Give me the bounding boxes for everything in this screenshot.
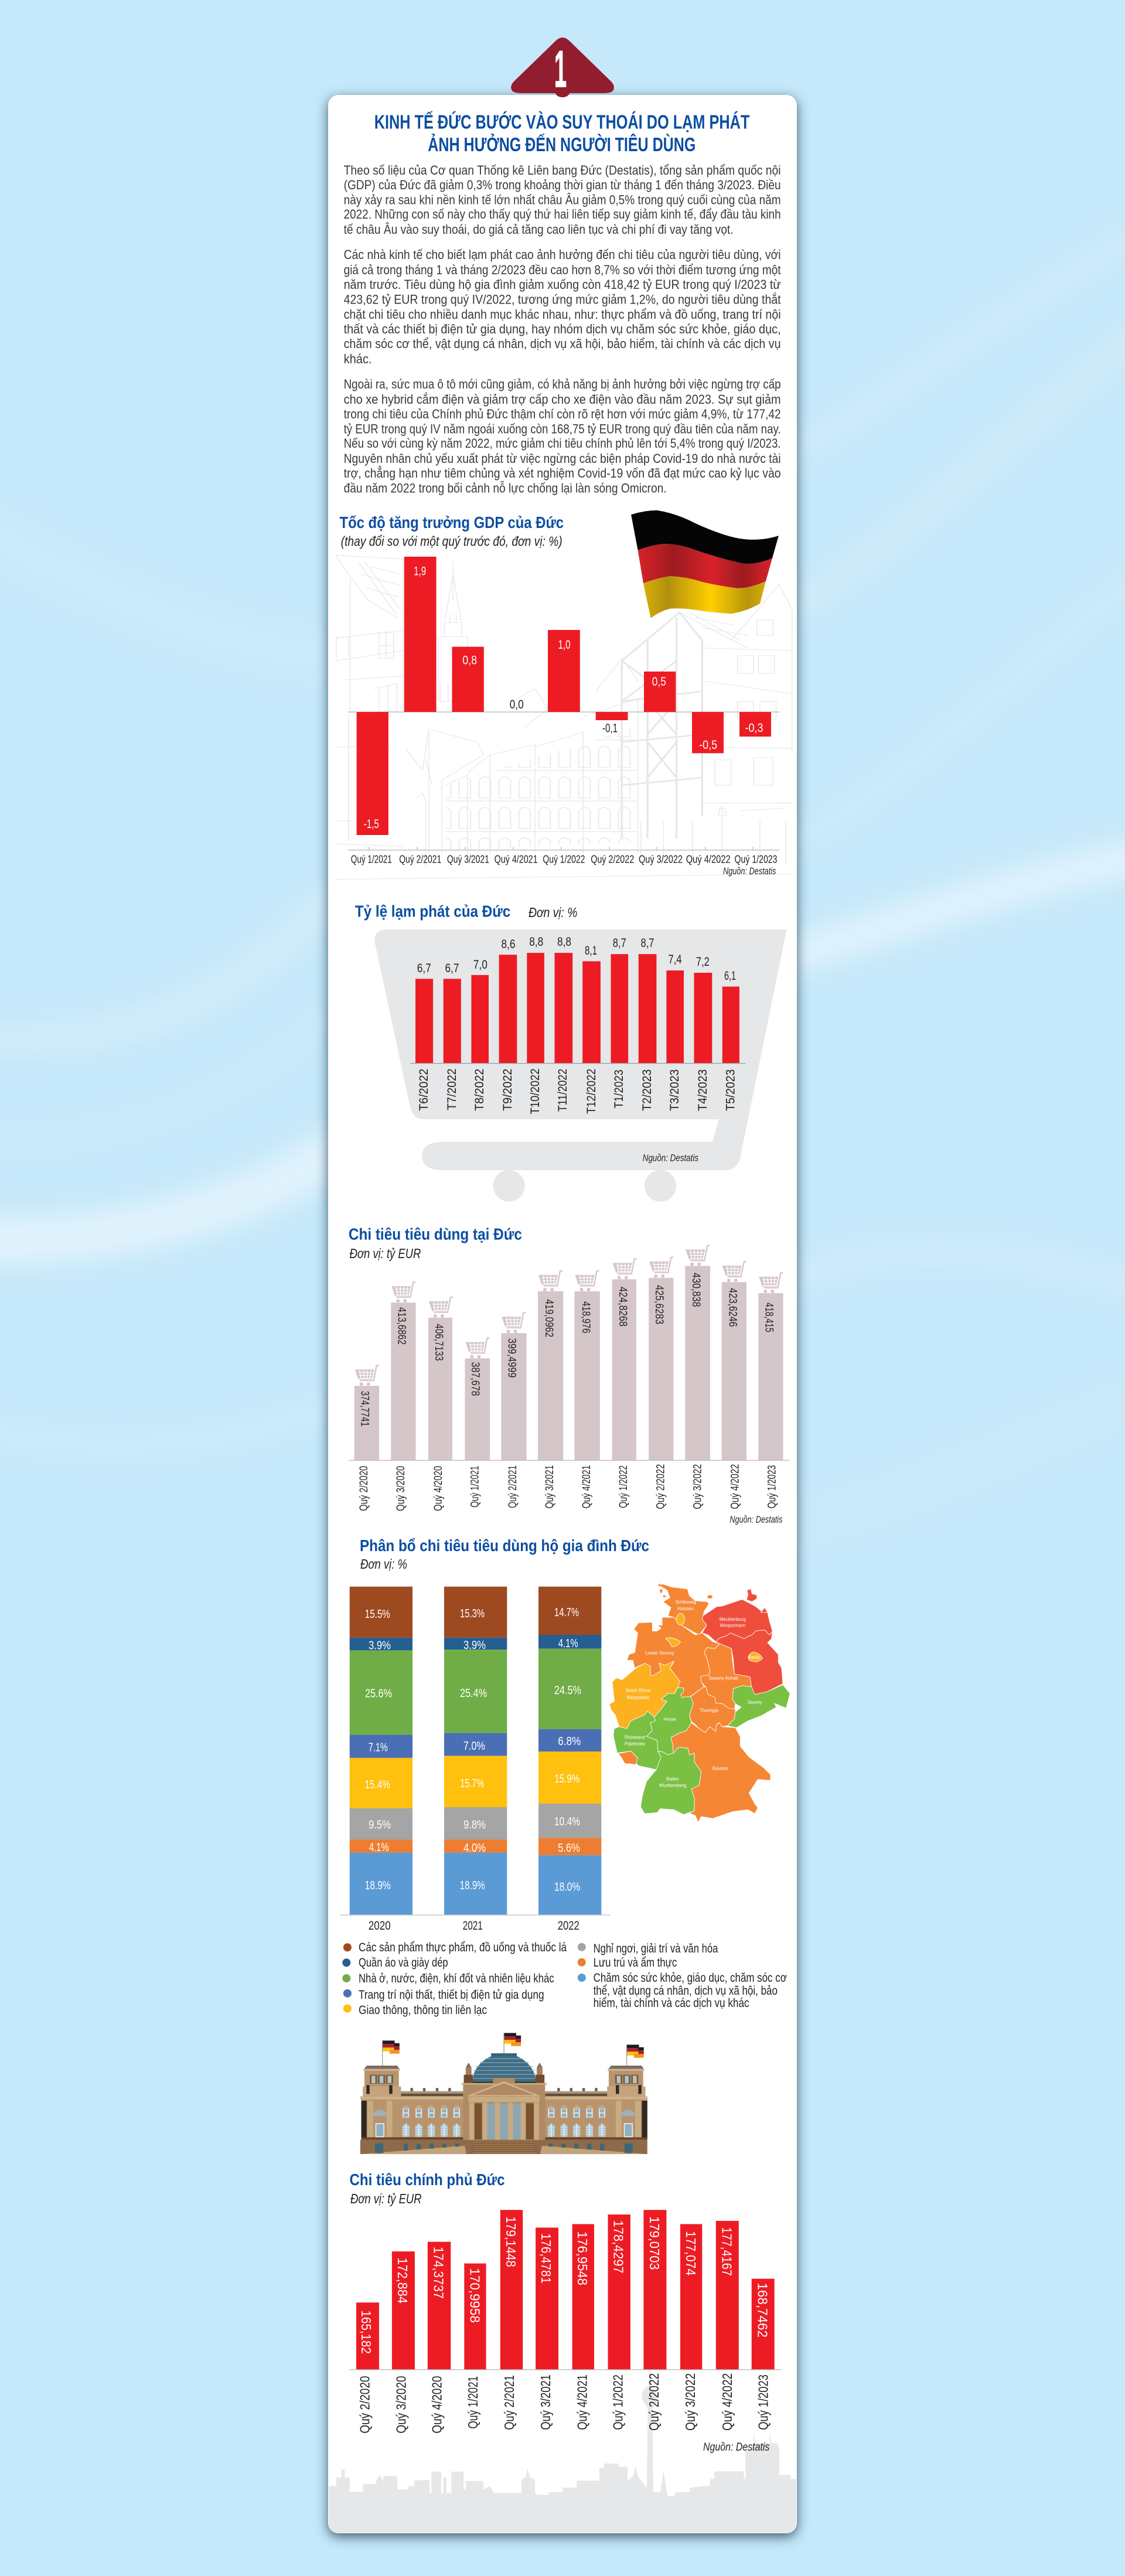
- government spending values: 170,9958: [467, 2268, 482, 2323]
- article body text: (GDP) của Đức đã giảm 0,3% trong khoảng thời gian từ tháng 1 đến tháng 3/2023. Điều: [344, 178, 781, 192]
- government spending quarter labels: Quý 2/2021: [502, 2375, 517, 2430]
- government spending values: [359, 2216, 770, 2354]
- Reichstag side towers: [363, 2066, 645, 2097]
- GDP value labels: 0,8: [462, 654, 477, 667]
- panel: consumer spending chart: [349, 1225, 790, 1525]
- stacked bar 2020: 15.5%: [365, 1608, 390, 1621]
- inflation month labels: T11/2022: [556, 1069, 570, 1112]
- panel: government spending chart: [326, 2170, 799, 2536]
- inflation bars: [415, 953, 739, 1064]
- article body text: tế châu Âu vào suy thoái, do giá cả tăng cao liên tục và chi phí đi vay tăng vọt.: [344, 222, 734, 237]
- year labels: 2020: [369, 1919, 391, 1933]
- consumer spending quarter labels: Quý 4/2022: [729, 1464, 742, 1509]
- GDP quarter labels: Quý 1/2022: [543, 853, 585, 865]
- chart heading: GDP growth: [340, 513, 564, 548]
- legend: Giao thông, thông tin liên lạc: [359, 2003, 487, 2017]
- GDP quarter labels: Quý 1/2023: [735, 853, 777, 865]
- consumer spending quarter labels: Quý 3/2020: [395, 1466, 407, 1511]
- inflation month labels: T10/2022: [529, 1068, 542, 1114]
- consumer spending values: 424,8268: [616, 1287, 629, 1327]
- government spending values: 172,884: [395, 2258, 410, 2304]
- stacked bar 2022: 5.6%: [558, 1842, 580, 1855]
- chart heading: consumer spending: Đơn vị: tỷ EUR: [349, 1246, 421, 1261]
- government spending quarter labels: Quý 4/2020: [429, 2376, 445, 2434]
- consumer spending values: 406,7133: [432, 1324, 445, 1361]
- legend: hiểm, tài chính và các dịch vụ khác: [594, 1996, 749, 2010]
- GDP value labels: 1,9: [414, 565, 426, 578]
- panel: household spending breakdown: [340, 1536, 790, 2017]
- government spending bars: [356, 2210, 775, 2370]
- map of German states: Schleswig: [676, 1599, 696, 1605]
- main white panel: [328, 95, 797, 2533]
- stacked bar 2020: 15.4%: [365, 1778, 390, 1791]
- government spending values: 165,182: [359, 2311, 374, 2354]
- chart heading: household spending: Phân bổ chi tiêu tiêu dùng hộ gia đình Đức: [360, 1536, 649, 1555]
- article body text: trợ, chẳng hạn như tiêm chủng và xét nghiệm Covid-19 vốn đã đạt mức cao kỷ lục vào: [344, 466, 781, 481]
- GDP bars: [357, 557, 771, 835]
- small cart icons above bars: [355, 1245, 783, 1386]
- inflation values: 8,8: [529, 935, 543, 949]
- stacked bar 2022: 6.8%: [558, 1735, 581, 1748]
- map of German states: Palatinate: [625, 1741, 645, 1747]
- stacked bar 2021: [444, 1587, 507, 1914]
- illustration: Reichstag building: [360, 2033, 647, 2154]
- inflation values: 8,7: [641, 936, 654, 950]
- consumer spending quarter labels: [358, 1464, 778, 1511]
- article body text: 2022. Những con số này cho thấy quý thứ hai liên tiếp suy giảm kinh tế, đẩy đầu tàu kinh: [344, 207, 781, 222]
- map of German states: Lower Saxony: [646, 1650, 675, 1656]
- article body text: thất và các thiết bị điện tử gia dụng, hay nhóm dịch vụ chăm sóc sức khỏe, giáo dục,: [344, 322, 781, 336]
- year labels: [369, 1919, 579, 1933]
- stacked bar 2022: 14.7%: [554, 1606, 579, 1619]
- title: [374, 111, 749, 155]
- Reichstag central portico: [462, 2078, 547, 2154]
- stacked bar 2021: 15.3%: [460, 1607, 485, 1620]
- consumer spending bars: [354, 1266, 783, 1460]
- consumer spending source: Nguồn: Destatis: [729, 1514, 783, 1525]
- inflation values: 6,7: [445, 962, 459, 975]
- government spending quarter labels: Quý 3/2022: [683, 2373, 698, 2431]
- consumer spending quarter labels: Quý 1/2022: [618, 1466, 630, 1508]
- GDP value labels: [364, 565, 763, 831]
- stacked bar 2020: 25.6%: [365, 1688, 392, 1701]
- map of German states: Westphalia: [626, 1695, 649, 1701]
- inflation month labels: T3/2023: [668, 1069, 681, 1111]
- government spending values: 177,4167: [720, 2227, 735, 2276]
- article body text: Nếu so với cùng kỳ năm 2022, mức giảm chi tiêu chính phủ lên tới 5,4% trong quý I/2023.: [344, 436, 781, 451]
- year labels: 2022: [558, 1919, 579, 1933]
- government spending values: 177,074: [683, 2231, 698, 2275]
- inflation values: 8,1: [585, 944, 597, 958]
- legend: [342, 1941, 787, 2017]
- GDP quarter labels: Quý 2/2022: [591, 853, 634, 865]
- government spending values: 168,7462: [755, 2283, 770, 2338]
- GDP value labels: -1,5: [364, 817, 379, 831]
- stacked bar 2021: 15.7%: [460, 1777, 484, 1790]
- consumer spending quarter labels: Quý 4/2020: [432, 1466, 445, 1511]
- stacked bar 2021: 25.4%: [460, 1687, 487, 1700]
- government spending values: 178,4297: [611, 2220, 626, 2274]
- Reichstag windows: [373, 2105, 635, 2153]
- Reichstag main body: [360, 2088, 647, 2154]
- consumer spending values: 413,6862: [395, 1307, 408, 1345]
- section number badge: [511, 38, 614, 98]
- inflation month labels: T9/2022: [501, 1069, 514, 1111]
- inflation month labels: [417, 1068, 737, 1114]
- article body text: Các nhà kinh tế cho biết lạm phát cao ảnh hưởng đến chi tiêu của người tiêu dùng, với: [344, 247, 781, 262]
- stacked bar 2021: 4.0%: [463, 1842, 486, 1855]
- icon: cart wheels: [493, 1170, 676, 1202]
- GDP value labels: -0,1: [602, 721, 618, 735]
- article body text: đầu năm 2022 trong bối cảnh nỗ lực chống lại làn sóng Omicron.: [344, 481, 667, 495]
- map of German states: Berlin: [748, 1654, 761, 1660]
- government spending quarter labels: Quý 3/2021: [538, 2374, 553, 2430]
- GDP value labels: -0,3: [745, 721, 763, 735]
- stacked bar 2020: 9.5%: [369, 1819, 391, 1832]
- icon: shopping cart body: [374, 929, 786, 1170]
- consumer spending quarter labels: Quý 2/2021: [507, 1466, 519, 1508]
- Reichstag dome: [464, 2053, 544, 2084]
- inflation month labels: T2/2023: [640, 1069, 654, 1111]
- government spending values: 174,3737: [431, 2247, 446, 2299]
- map of German states: Baden: [666, 1776, 679, 1782]
- inflation values: 7,0: [473, 958, 488, 972]
- map of German states: [609, 1583, 790, 1822]
- government spending quarter labels: Quý 3/2020: [393, 2376, 408, 2434]
- stacked bar 2022: 10.4%: [554, 1815, 580, 1828]
- inflation values: 7,2: [696, 955, 710, 969]
- government spending values: 179,1448: [503, 2216, 519, 2267]
- consumer spending values: 399,4999: [506, 1338, 518, 1378]
- consumer spending values: 418,415: [762, 1303, 775, 1333]
- legend: Nhà ở, nước, điện, khí đốt và nhiên liệu khác: [359, 1972, 554, 1985]
- inflation values: [417, 935, 736, 983]
- map of German states: Wurttemberg: [659, 1783, 687, 1788]
- government spending quarter labels: Quý 4/2021: [575, 2374, 590, 2430]
- consumer spending quarter labels: Quý 1/2023: [766, 1465, 778, 1508]
- government spending values: 176,9548: [575, 2231, 590, 2285]
- article body text: tỷ EUR trong quý IV năm ngoái xuống còn 168,75 tỷ EUR trong quý đầu tiên của năm nay.: [344, 421, 781, 436]
- government spending values: 176,4781: [538, 2233, 554, 2284]
- chart heading: GDP growth: (thay đổi so với một quý trước đó, đơn vị: %): [341, 533, 562, 548]
- consumer spending quarter labels: Quý 3/2022: [691, 1464, 704, 1509]
- stacked bar 2022: 15.9%: [554, 1773, 579, 1786]
- consumer spending quarter labels: Quý 4/2021: [581, 1465, 593, 1508]
- stacked bar 2020: [350, 1587, 412, 1914]
- illustration: Berlin skyline: [326, 2370, 799, 2536]
- map of German states: Mecklenburg: [720, 1616, 746, 1622]
- GDP quarter labels: Quý 2/2021: [399, 853, 441, 865]
- sketch of a German street behind the chart: [336, 556, 792, 880]
- government spending quarter labels: Quý 1/2023: [756, 2374, 771, 2430]
- icon: German flag: [631, 510, 779, 618]
- chart heading: household spending: [360, 1536, 649, 1572]
- chart heading: consumer spending: [349, 1225, 522, 1261]
- title: ẢNH HƯỞNG ĐẾN NGƯỜI TIÊU DÙNG: [428, 134, 696, 155]
- legend: thể, vật dụng cá nhân, dịch vụ xã hội, bảo: [594, 1984, 778, 1998]
- inflation values: 7,4: [668, 953, 682, 966]
- flags on the Reichstag: [382, 2033, 644, 2070]
- government spending quarter labels: Quý 1/2021: [465, 2376, 480, 2429]
- consumer spending values: 430,838: [690, 1273, 702, 1307]
- article body text: [344, 163, 781, 495]
- stacked bar 2020: 4.1%: [369, 1841, 389, 1854]
- map of German states: Holstein: [677, 1606, 694, 1611]
- GDP source: Nguồn: Destatis: [723, 866, 776, 877]
- consumer spending quarter labels: Quý 3/2021: [544, 1465, 556, 1508]
- consumer spending quarter labels: Quý 2/2022: [655, 1464, 667, 1509]
- inflation month labels: T6/2022: [417, 1069, 431, 1111]
- consumer spending values: 374,7741: [358, 1391, 370, 1426]
- inflation month labels: T7/2022: [445, 1069, 459, 1110]
- inflation values: 8,6: [502, 938, 516, 951]
- government spending quarter labels: Quý 1/2022: [611, 2374, 626, 2430]
- GDP quarter labels: Quý 1/2021: [351, 853, 392, 865]
- map of German states: North Rhine: [626, 1688, 650, 1694]
- consumer spending values: 425,6283: [653, 1285, 665, 1324]
- stacked bar 2022: 18.0%: [554, 1880, 580, 1893]
- stacked bar 2021: 18.9%: [460, 1879, 485, 1892]
- GDP value labels: 1,0: [558, 638, 571, 652]
- consumer spending values: [358, 1273, 775, 1426]
- consumer spending values: 387,678: [469, 1362, 481, 1396]
- article body text: Nguyên nhân chủ yếu xuất phát từ việc ngừng các biện pháp Covid-19 do nhà nước tài: [344, 451, 781, 466]
- chart heading: inflation: Đơn vị: %: [529, 905, 577, 920]
- stacked bar 2021: 3.9%: [463, 1639, 486, 1652]
- chart heading: government spending: Chi tiêu chính phủ Đức: [349, 2170, 505, 2189]
- article body text: trong chi tiêu của Chính phủ Đức thậm chí còn rõ rệt hơn với mức giảm 4,9%, từ 177,42: [344, 407, 781, 421]
- inflation month labels: T12/2022: [585, 1069, 598, 1114]
- map of German states: Saxony: [748, 1699, 763, 1705]
- inflation values: 8,7: [613, 936, 626, 950]
- article body text: chăm sóc cơ thể, vật dụng cá nhân, dịch vụ xã hội, bảo hiểm, tài chính và các dịch vụ: [344, 336, 781, 351]
- inflation values: 6,7: [417, 962, 431, 975]
- stacked bar 2020: 7.1%: [369, 1742, 388, 1754]
- chart heading: consumer spending: Chi tiêu tiêu dùng tại Đức: [349, 1225, 522, 1243]
- GDP quarter labels: Quý 4/2022: [686, 853, 731, 865]
- government spending values: 179,0703: [647, 2216, 662, 2270]
- government spending quarter labels: [357, 2373, 771, 2434]
- article body text: năm trước. Tiêu dùng hộ gia đình giảm xuống còn 418,42 tỷ EUR trong quý I/2023 từ: [344, 277, 781, 292]
- inflation values: 6,1: [724, 969, 736, 983]
- map of German states: Bavaria: [712, 1766, 728, 1771]
- title: KINH TẾ ĐỨC BƯỚC VÀO SUY THOÁI DO LẠM PHÁT: [374, 111, 749, 132]
- inflation values: 8,8: [557, 935, 571, 949]
- article body text: cho xe hybrid cắm điện và giảm trợ cấp cho xe điện vào đầu năm 2023. Sự sụt giảm: [344, 392, 781, 407]
- stacked bar 2022: 24.5%: [554, 1684, 581, 1697]
- government spending quarter labels: Quý 2/2020: [357, 2376, 372, 2434]
- legend: Các sản phẩm thực phẩm, đồ uống và thuốc lá: [359, 1941, 567, 1954]
- government spending quarter labels: Quý 2/2022: [646, 2373, 662, 2431]
- map of German states: Thuringia: [700, 1708, 718, 1713]
- GDP quarter labels: Quý 3/2021: [447, 853, 489, 865]
- consumer spending values: 419,0962: [543, 1299, 555, 1337]
- legend: Trang trí nội thất, thiết bị điện tử gia dụng: [359, 1988, 544, 2002]
- government spending source: Nguồn: Destatis: [703, 2441, 770, 2454]
- stacked bar 2022: [538, 1587, 601, 1914]
- consumer spending values: 423,6246: [727, 1288, 738, 1327]
- legend: Chăm sóc sức khỏe, giáo dục, chăm sóc cơ: [594, 1971, 787, 1985]
- GDP quarter labels: Quý 3/2022: [639, 853, 683, 865]
- inflation month labels: T4/2023: [696, 1069, 710, 1111]
- GDP quarter labels: Quý 4/2021: [495, 853, 538, 865]
- article body text: Theo số liệu của Cơ quan Thống kê Liên bang Đức (Destatis), tổng sản phẩm quốc nội: [344, 163, 781, 178]
- GDP value labels: 0,5: [652, 675, 666, 689]
- inflation month labels: T1/2023: [612, 1069, 626, 1108]
- article body text: này xảy ra sau khi nền kinh tế lớn nhất châu Âu giảm 0,5% trong quý cuối cùng của năm: [344, 192, 781, 207]
- article body text: 423,62 tỷ EUR trong quý IV/2022, tương ứng mức giảm 1,2%, do người tiêu dùng thắt: [344, 292, 781, 306]
- inflation month labels: T5/2023: [724, 1069, 737, 1111]
- GDP quarter labels: [351, 853, 777, 865]
- consumer spending quarter labels: Quý 1/2021: [469, 1466, 482, 1507]
- map of German states: Saxony Anhalt: [709, 1675, 738, 1681]
- zero line and axis: [348, 712, 780, 850]
- consumer spending values: 418,976: [579, 1301, 592, 1333]
- stacked bar 2021: 9.8%: [463, 1819, 486, 1832]
- stacked bar 2020: 18.9%: [365, 1879, 391, 1892]
- year labels: 2021: [463, 1919, 483, 1933]
- article body text: Ngoài ra, sức mua ô tô mới cũng giảm, có khả năng bị ảnh hưởng bởi việc ngừng trợ cấp: [344, 377, 781, 391]
- map of German states: Hesse: [663, 1716, 676, 1722]
- stacked bar 2021: 7.0%: [463, 1740, 485, 1753]
- legend: Quần áo và giày dép: [359, 1956, 448, 1970]
- inflation month labels: T8/2022: [473, 1069, 486, 1111]
- government spending quarter labels: Quý 4/2022: [720, 2373, 735, 2431]
- inflation source: Nguồn: Destatis: [643, 1152, 698, 1164]
- consumer spending quarter labels: Quý 2/2020: [358, 1466, 370, 1511]
- panel: inflation chart in a shopping cart: [355, 902, 786, 1202]
- legend: Lưu trú và ẩm thực: [594, 1956, 677, 1970]
- chart heading: household spending: Đơn vị: %: [360, 1556, 407, 1572]
- map of German states: Worpormern: [720, 1623, 745, 1628]
- GDP value labels: -0,5: [699, 738, 717, 752]
- chart heading: inflation: Tỷ lệ lạm phát của Đức: [355, 902, 510, 921]
- chart heading: government spending: Đơn vị: tỷ EUR: [350, 2191, 421, 2206]
- GDP value labels: 0,0: [510, 698, 524, 711]
- chart heading: government spending: [349, 2170, 505, 2206]
- article body text: giá cả trong tháng 1 và tháng 2/2023 đều cao hơn 8,7% so với thời điểm tương ứng một: [344, 263, 781, 277]
- panel: GDP growth chart: [336, 510, 792, 880]
- article body text: khác.: [344, 352, 372, 366]
- legend: Nghỉ ngơi, giải trí và văn hóa: [594, 1942, 718, 1955]
- chart heading: GDP growth: Tốc độ tăng trưởng GDP của Đức: [340, 513, 564, 531]
- map of German states: Rhineland: [625, 1735, 645, 1740]
- stacked bar 2020: 3.9%: [369, 1640, 391, 1652]
- article body text: chặt chi tiêu cho nhiều danh mục khác nhau, như: thực phẩm và đồ uống, trang trí nội: [344, 307, 781, 322]
- stacked bar 2022: 4.1%: [558, 1637, 578, 1650]
- section number badge: 1: [554, 40, 567, 98]
